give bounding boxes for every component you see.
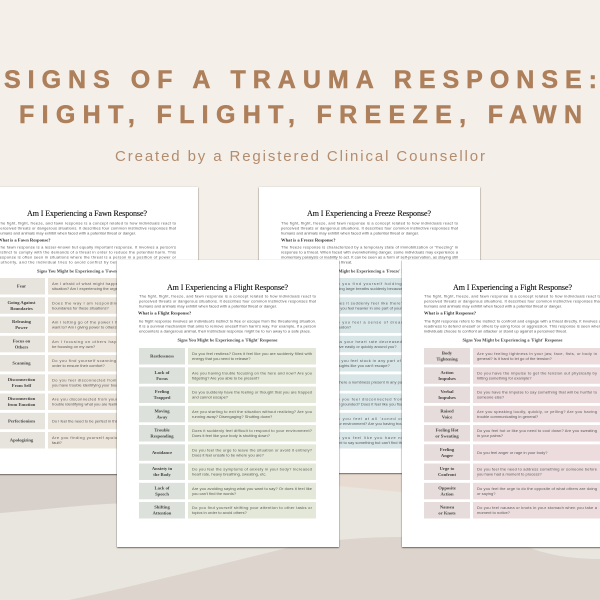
- flight intro text: encounters a dangerous animal, their instinctual response might be to run away to a safe place.: [139, 328, 311, 334]
- panel: freeze response page: [259, 187, 480, 473]
- fight intro text: individuals choose to confront an attacker or stand up against a perceived threat.: [424, 328, 567, 334]
- fight table: Do you feel the urge to do the opposite of what others are doing: [477, 486, 597, 491]
- flight table: Avoidance: [152, 450, 172, 455]
- fight table: Impulses: [438, 376, 456, 381]
- panel: fight response page: Signs You Might be Experiencing a 'Fight' Response: [462, 338, 563, 342]
- fight table: [424, 348, 600, 518]
- freeze table: Do you feel disconnected from yourself? Do you feel: [334, 396, 454, 402]
- fawn table: Disconnection: [8, 377, 36, 382]
- flight table: Do you feel the symptoms of anxiety in your body? Increased: [192, 466, 312, 472]
- freeze table: Do you feel at all 'zoned out' or 'hypnotized' by: [334, 416, 454, 421]
- fawn table: Going Against: [8, 300, 36, 305]
- flight page heading: Am I Experiencing a Flight Response?: [167, 283, 288, 292]
- freeze intro text: perceived threats or dangerous situations. It describes four common instinctive responses that: [281, 226, 459, 230]
- fawn intro text: instinct to comply with the demands of a threat in order to reduce the potential harm. This: [0, 250, 176, 254]
- freeze table: taking large breaths suddenly because of this?: [334, 286, 417, 291]
- flight table: fidgeting? Are you able to be present?: [192, 375, 260, 380]
- flight table: Attention: [153, 511, 172, 516]
- freeze table: want to say something but can't find the words?: [334, 440, 419, 445]
- flight table: Lack of: [155, 485, 170, 490]
- fawn table: you have trouble identifying your boundaries?: [52, 382, 133, 387]
- flight table: Trapped: [154, 395, 171, 400]
- flight table: Do you suddenly have the feeling or thought that you are trapped: [192, 390, 312, 394]
- fight table: Action: [440, 370, 454, 375]
- fight table: Verbal: [440, 389, 454, 394]
- flight table: Moving: [154, 408, 170, 413]
- fight table: Do you have the impulse to say something that will be hurtful to: [477, 390, 598, 394]
- fight table: trouble communicating in general?: [477, 414, 539, 419]
- fight page heading: Am I Experiencing a Fight Response?: [453, 283, 572, 292]
- flight intro text: The fight, flight, freeze, and fawn response is a concept related to how individuals react to: [139, 294, 317, 298]
- fawn intro text: response is often seen in situations where the threat is a person in a position of power or: [0, 254, 177, 260]
- panel: flight response page: Signs You Might be Experiencing a 'Flight' Response: [178, 338, 278, 342]
- fight table: general? Is it hard to let go of the tension?: [477, 356, 552, 361]
- flight table: Restlessness: [150, 354, 174, 358]
- panel: fawn response page: [0, 187, 198, 474]
- fawn table: Am I focusing on others happiness when I should be: [52, 339, 173, 344]
- fight table: hitting something for example?: [477, 375, 532, 380]
- freeze table: Do you feel heavier in one part of your body?: [334, 305, 415, 310]
- fawn table: boundaries for these situations?: [52, 305, 109, 310]
- fawn intro text: humans and animals may exhibit when faced with a potential threat or danger.: [0, 230, 136, 236]
- fawn table: Do you find yourself scanning individuals around you in: [52, 358, 172, 363]
- flight table: Trouble: [154, 428, 170, 432]
- panel: fawn response page: Signs You Might be Experiencing a 'Fawn' Response: [37, 268, 137, 274]
- fight table: Do you feel hot or like you need to cool down? Are you sweating: [477, 428, 597, 433]
- fight intro text: The fight, flight, freeze, and fawn response is a concept related to how individuals react to: [424, 294, 600, 298]
- flight table: topics in order to avoid others?: [192, 510, 247, 515]
- fight table: Nausea: [440, 504, 455, 510]
- fight table: Are you speaking loudly, quickly, or yelling? Are you having: [477, 409, 597, 414]
- freeze intro text: momentary paralysis or inability to act. It can be seen as a form of self-preservation, as staying still: [281, 254, 458, 260]
- freeze page heading: Am I Experiencing a Freeze Response?: [307, 209, 431, 218]
- fight table: Confront: [438, 472, 456, 477]
- flight intro text: humans and animals may exhibit when faced with a potential threat or danger.: [139, 304, 277, 308]
- fight intro text: [424, 294, 600, 334]
- fawn table: Are you disconnected from your emotions? Are you having: [52, 396, 172, 402]
- flight table: Do you feel restless? Does it feel like you are suddenly filled with: [192, 351, 312, 356]
- fawn intro text: The fight, flight, freeze, and fawn response is a concept related to how individuals react to: [0, 220, 177, 226]
- flight table: Are you having trouble focusing on the here and now? Are you: [192, 370, 312, 375]
- fawn intro text: The fawn response is a lesser-known but equally important response. It involves a person's: [0, 244, 176, 250]
- panel: flight response page: What is a Flight Response?: [138, 310, 192, 316]
- fight table: Do you feel the need to address something or someone before: [477, 466, 598, 472]
- fawn table: be focusing on my own?: [52, 344, 96, 349]
- fight table: Are you feeling tightness in your jaw, face, fists, or body in: [477, 351, 597, 356]
- fawn table: Apologizing: [10, 438, 34, 442]
- flight table: the Body: [153, 472, 171, 477]
- fight table: Tightening: [436, 357, 458, 362]
- flight table: Does it suddenly feel difficult to respond to your environment?: [192, 428, 313, 433]
- flight table: Away: [157, 414, 168, 420]
- panel: freeze response page: What is a Freeze Response?: [281, 238, 336, 242]
- fawn intro text: authority, and the individual tries to avoid conflict by being submissive or agreeable.: [0, 260, 176, 264]
- freeze table: Is there a numbness present in any part of your body?: [334, 379, 431, 384]
- panel: fight response page: [402, 260, 600, 547]
- fight table: Opposite: [438, 485, 456, 490]
- fight table: moment to notice?: [477, 510, 511, 515]
- fight table: Raised: [440, 408, 454, 413]
- fawn table: Am I letting go of the power I hold? Am I doing what they: [52, 320, 172, 324]
- flight table: running away? Disengaging? Shutting down?: [192, 414, 273, 419]
- freeze intro text: response to a threat. When faced with overwhelming danger, some individuals may experience a: [281, 250, 459, 254]
- fawn page heading: Am I Experiencing a Fawn Response?: [27, 209, 147, 218]
- fight table: Do you have the impulse to get the tension out physically by: [477, 370, 597, 375]
- fight table: Voice: [442, 414, 452, 420]
- flight table: Are you avoiding saying what you want to say? Or does it feel like: [192, 486, 313, 491]
- fawn table: from Emotion: [8, 402, 36, 407]
- flight table: Do you feel the urge to leave the situation or avoid it entirely?: [192, 447, 313, 452]
- freeze table: Do you feel a sense of dread or foreboding in this: [334, 320, 454, 324]
- flight intro text: It is a survival mechanism that aims to remove oneself from harm's way. For example, if a person: [139, 324, 316, 328]
- fight intro text: The fight response refers to the instinct to confront and engage with a threat directly. It involves a: [424, 318, 600, 324]
- fight table: Impulses: [438, 395, 456, 400]
- fawn table: Are you finding yourself apologizing for things not your: [52, 435, 173, 440]
- freeze intro text: The fight, flight, freeze, and fawn response is a concept related to how individuals react to: [281, 220, 459, 226]
- panel: fight response page: What is a Fight Response?: [424, 310, 477, 316]
- fawn table: Perfectionism: [8, 418, 35, 423]
- flight table: Feeling: [155, 389, 170, 394]
- freeze table: thoughts like you can't escape?: [334, 363, 390, 368]
- freeze table: Do you feel stuck in any part of your body? Do you have: [334, 358, 455, 363]
- freeze table: move easily or quickly around you?: [334, 344, 397, 349]
- flight table: [139, 348, 316, 518]
- freeze table: Do you feel like you have nothing to say? Do you: [334, 435, 454, 440]
- flight table: Anxiety in: [152, 466, 173, 471]
- freeze intro text: [281, 220, 459, 264]
- title: FIGHT, FLIGHT, FREEZE, FAWN: [19, 101, 582, 129]
- fawn table: From Self: [12, 383, 32, 388]
- fawn table: Boundaries: [10, 306, 33, 311]
- panel: flight response page: [117, 260, 339, 547]
- fawn table: Others: [15, 344, 28, 350]
- flight intro text: he flight response involves an individual's instinct to flee or escape from the threatening situation.: [139, 318, 316, 324]
- fight table: Feeling Hot: [436, 428, 459, 432]
- flight intro text: [139, 294, 317, 334]
- fight table: someone else?: [477, 394, 505, 400]
- flight table: energy that you need to release?: [192, 356, 251, 361]
- fawn table: order to ensure their comfort?: [52, 363, 105, 368]
- freeze table: Do you find yourself holding your breath? Are you: [334, 281, 454, 286]
- freeze intro text: can help one go unnoticed by the threat.: [281, 260, 352, 264]
- flight table: Lack of: [155, 370, 170, 375]
- flight table: you can't find the words?: [192, 491, 237, 496]
- fight table: Urge to: [440, 466, 455, 471]
- fawn table: Releasing: [12, 319, 32, 324]
- fawn table: Scanning: [12, 360, 31, 366]
- flight table: Speech: [155, 492, 169, 496]
- fight table: you have had a moment to process?: [477, 472, 542, 476]
- freeze table: [330, 278, 458, 448]
- fawn intro text: perceived threats or dangerous situations. It describes four common instinctive responses that: [0, 226, 177, 230]
- fight intro text: humans and animals may exhibit when faced with a potential threat or danger.: [424, 304, 562, 308]
- freeze intro text: The freeze response is characterized by a temporary state of immobilization or "freezing" in: [281, 244, 458, 250]
- fawn table: [0, 278, 176, 448]
- fight table: Anger: [441, 453, 453, 458]
- flight table: Does it feel like your body is shutting down?: [192, 433, 271, 438]
- fawn table: Do I feel the need to be perfect in this situation?: [52, 418, 137, 423]
- fight table: Feeling: [440, 447, 455, 452]
- flight table: Does it feel unsafe to be where you are?: [192, 452, 265, 457]
- flight table: Focus: [156, 376, 168, 381]
- flight table: Responding: [150, 434, 174, 439]
- flight table: heart rate, heavy breathing, sweating, etc.: [192, 472, 266, 476]
- fawn table: Disconnection: [8, 396, 36, 401]
- freeze intro text: humans and animals may exhibit when faced with a potential threat or danger.: [281, 230, 419, 236]
- freeze table: not grounded? Does it feel like you float?: [334, 402, 407, 406]
- fight table: or Knots: [438, 511, 456, 516]
- fight table: in your palms?: [477, 433, 504, 438]
- fawn table: Focus on: [13, 338, 31, 343]
- freeze table: your environment? Are you having trouble focusing?: [334, 421, 427, 426]
- freeze table: situation?: [334, 324, 352, 330]
- title: SIGNS OF A TRAUMA RESPONSE:: [4, 66, 597, 94]
- fight table: Do you feel nausea or knots in your stomach when you take a: [477, 505, 598, 510]
- flight table: and cannot escape?: [192, 394, 229, 400]
- fawn table: Fear: [17, 284, 26, 288]
- fawn intro text: [0, 220, 177, 264]
- freeze table: Does it suddenly feel like there's been a weight on you?: [334, 300, 455, 305]
- freeze table: Has your heart rate decreased? Do you find it hard to: [334, 339, 455, 344]
- fawn table: trouble identifying what you are feeling?: [52, 402, 123, 406]
- fight table: Body: [442, 350, 453, 356]
- flight intro text: perceived threats or dangerous situations. It describes four common instinctive responses that: [139, 298, 317, 304]
- fight table: Do you feel anger or rage in your body?: [477, 450, 548, 455]
- fawn table: Do you feel disconnected from yourself? Do you feel like: [52, 377, 173, 382]
- fight table: or Sweating: [435, 434, 459, 439]
- fight intro text: perceived threats or dangerous situations. It describes four common instinctive responses that: [424, 298, 600, 304]
- title: [4, 66, 597, 129]
- subtitle: Created by a Registered Clinical Counsellor: [115, 148, 485, 165]
- fawn table: want to? Am I giving power to others?: [52, 324, 119, 330]
- flight table: Do you find yourself shifting your attention to other tasks or: [192, 505, 313, 510]
- fawn table: Power: [15, 325, 28, 330]
- fight table: Action: [440, 492, 454, 496]
- flight table: Shifting: [154, 504, 170, 510]
- fawn table: situation? Am I experiencing the urge to please?: [52, 286, 138, 291]
- fawn table: Am I afraid of what might happen if I do not comply in this: [52, 281, 172, 286]
- flight table: Are you starting to exit the situation without realizing? Are you: [192, 409, 312, 414]
- fawn table: fault?: [52, 440, 63, 445]
- fawn table: Does the way I am responding go against my personal: [52, 300, 172, 305]
- panel: freeze response page: Signs You Might be Experiencing a 'Freeze' Response: [319, 268, 419, 274]
- fight intro text: readiness to defend oneself or others by using force or aggression. This response is seen when: [424, 324, 600, 328]
- fight table: or saying?: [477, 491, 496, 496]
